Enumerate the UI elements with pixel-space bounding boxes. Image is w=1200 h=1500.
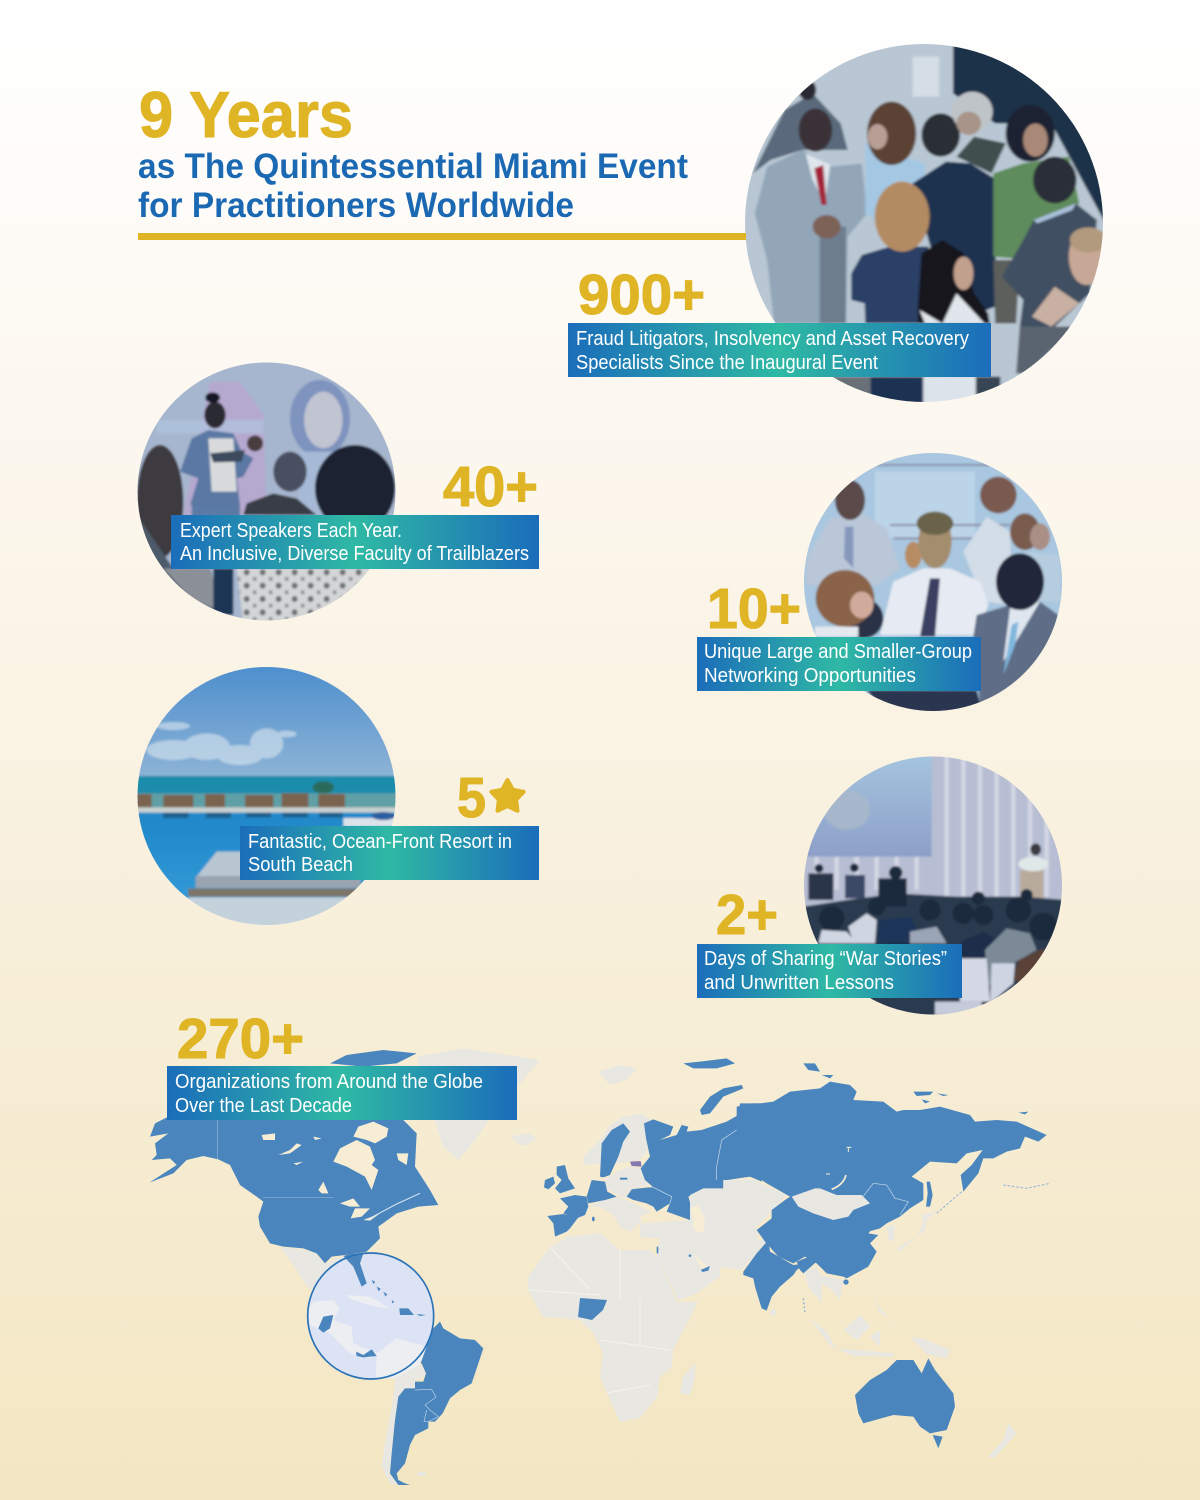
map: eastern Russia and China	[737, 1063, 1050, 1285]
caption bar: Networking Opportunities	[704, 665, 916, 687]
photo: ocean-front pool	[138, 667, 396, 925]
caption bar: Unique Large and Smaller-Group	[704, 641, 972, 663]
caption bar: Specialists Since the Inaugural Event	[576, 352, 878, 374]
photo: conference audience	[804, 756, 1062, 1014]
number: 270+: 270+	[177, 1007, 304, 1071]
caption bar	[697, 637, 981, 691]
number: 10+: 10+	[707, 577, 801, 641]
caption bar	[568, 323, 991, 377]
map: India	[743, 1240, 817, 1311]
inset land: Central America	[308, 1300, 378, 1358]
photo: colleagues talking	[804, 453, 1062, 711]
photo: networking crowd	[745, 44, 1103, 402]
caption bar: Organizations from Around the Globe	[175, 1071, 483, 1093]
photo: speaker on stage	[138, 362, 396, 620]
caption bar: An Inclusive, Diverse Faculty of Trailblazers	[180, 543, 529, 565]
inset outline	[308, 1253, 434, 1379]
map: Oceania and Arctic	[598, 1058, 1017, 1458]
inset land: Bahamas	[372, 1280, 394, 1303]
map: Greenland, Iceland, Ellesmere	[330, 1048, 540, 1160]
inset land: Colombia and Venezuela	[376, 1338, 427, 1379]
inset land: Cuba	[347, 1295, 392, 1309]
number: 900+: 900+	[578, 263, 705, 327]
gold rule	[138, 233, 746, 240]
inset land: Florida	[343, 1253, 367, 1287]
caption bar: Fantastic, Ocean-Front Resort in	[248, 831, 512, 853]
panel: 10+ networking	[697, 442, 1070, 722]
caption bar: Expert Speakers Each Year.	[180, 520, 402, 542]
caption bar: Days of Sharing “War Stories”	[704, 948, 947, 970]
inset land: Guatemala	[318, 1315, 333, 1333]
caption bar: Over the Last Decade	[175, 1095, 352, 1117]
map: Middle East and Central Asia	[640, 1180, 893, 1357]
number: 2+: 2+	[716, 883, 778, 947]
caption bar	[697, 944, 962, 998]
subheading: as The Quintessential Miami Event	[138, 147, 688, 186]
caption bar: South Beach	[248, 854, 353, 876]
inset land: Dominican Republic and Puerto Rico	[399, 1308, 426, 1316]
map: Africa	[528, 1233, 698, 1422]
panel: 900+ litigators	[568, 33, 1114, 410]
caption bar	[171, 515, 539, 569]
panel: 40+ speakers	[130, 355, 539, 628]
world map	[149, 1048, 1050, 1485]
heading: 9 Years: 9 Years	[139, 78, 353, 151]
title block	[138, 78, 746, 240]
caption bar	[167, 1066, 517, 1120]
caption bar: Fraud Litigators, Insolvency and Asset Recovery	[576, 328, 969, 350]
map: South America	[375, 1322, 483, 1485]
icon: star	[491, 780, 524, 811]
number: 40+: 40+	[443, 455, 538, 519]
map: Europe and western Russia	[520, 1103, 762, 1237]
panel: 270+ organizations	[167, 1007, 517, 1120]
subheading: for Practitioners Worldwide	[138, 186, 574, 225]
panel: 2+ days	[697, 747, 1070, 1027]
inset circle: Caribbean	[308, 1253, 434, 1379]
panel: 5 star resort	[130, 660, 539, 933]
inset land: Panama	[356, 1349, 377, 1357]
caption bar: and Unwritten Lessons	[704, 972, 894, 994]
map: North America	[149, 1117, 438, 1297]
number: 5: 5	[457, 766, 486, 830]
subheading	[138, 147, 688, 225]
caption bar	[240, 826, 539, 880]
